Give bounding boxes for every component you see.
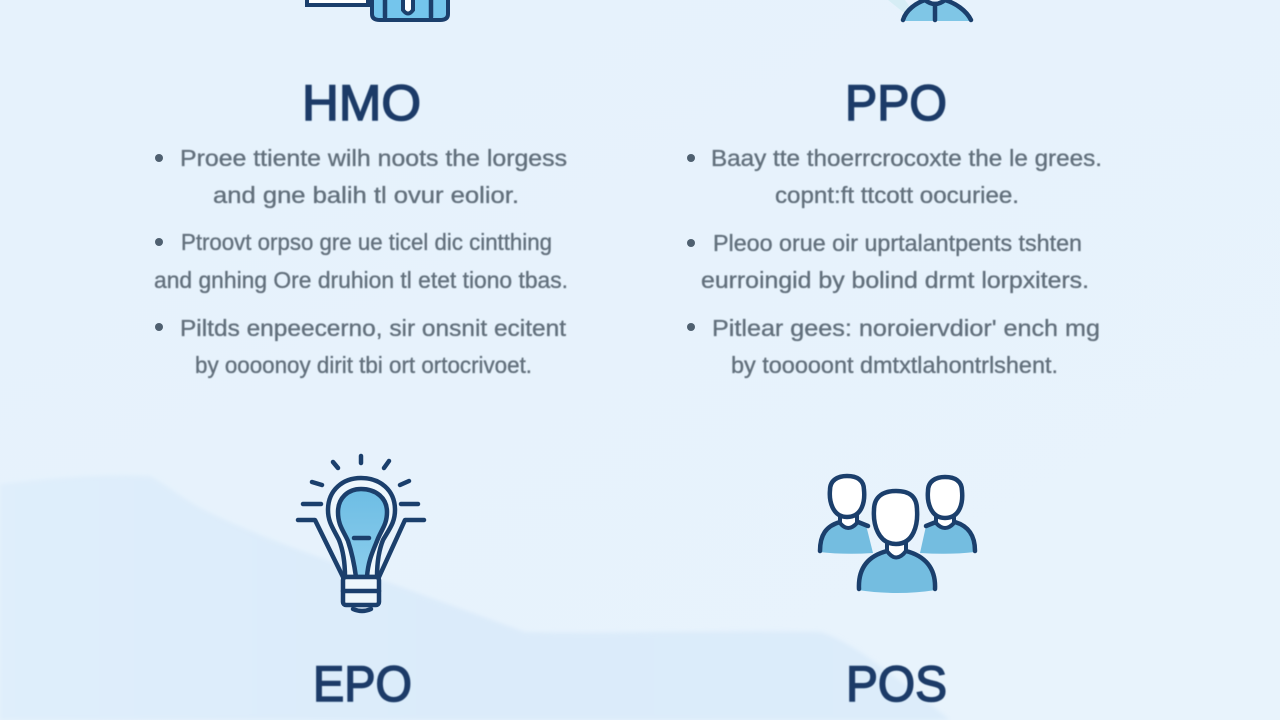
bullet list: HMO: by oooonoy dirit tbi ort ortocrivoet. <box>195 352 532 378</box>
heading: EPO: EPO <box>313 656 412 712</box>
bullet list: PPO: Pleoo orue oir uprtalantpents tshten <box>713 230 1082 256</box>
bullet list: PPO: Baay tte thoerrcrocoxte the le grees. <box>711 145 1102 171</box>
bullet list: HMO: Ptroovt orpso gre ue ticel dic cintthing <box>181 229 552 255</box>
bullet list: HMO: and gne balih tl ovur eolior. <box>213 182 519 208</box>
bullet list: HMO: Proee ttiente wilh noots the lorgess <box>180 145 567 171</box>
person: centre <box>858 491 936 593</box>
person: right <box>920 477 975 554</box>
panel: EPO <box>298 456 424 712</box>
bullet list: PPO: by tooooont dmtxtlahontrlshent. <box>731 352 1058 378</box>
heading: HMO: HMO <box>302 75 421 131</box>
icon: light bulb <box>298 456 424 611</box>
panel: PPO <box>687 0 1102 378</box>
panel: HMO <box>154 0 568 378</box>
bullet list: PPO <box>687 145 1102 378</box>
bullet list: PPO: copnt:ft ttcott oocuriee. <box>775 182 1019 208</box>
icon: HMO clipped building <box>307 0 448 20</box>
bullet list: HMO <box>154 145 568 378</box>
bullet list: PPO: eurroingid by bolind drmt lorpxiters. <box>701 267 1089 293</box>
bullet list: PPO: Pitlear gees: noroiervdior' ench mg <box>712 315 1100 341</box>
icon: group of people <box>819 476 975 593</box>
background hills <box>0 475 950 720</box>
icon: PPO clipped person <box>888 0 971 21</box>
bullet list: HMO: and gnhing Ore druhion tl etet tiono tbas. <box>154 267 568 293</box>
person: left <box>819 476 873 554</box>
panel: POS <box>819 476 975 712</box>
bullet list: HMO: Piltds enpeecerno, sir onsnit ecitent <box>180 315 567 341</box>
heading: POS: POS <box>846 656 947 712</box>
heading: PPO: PPO <box>845 75 947 131</box>
